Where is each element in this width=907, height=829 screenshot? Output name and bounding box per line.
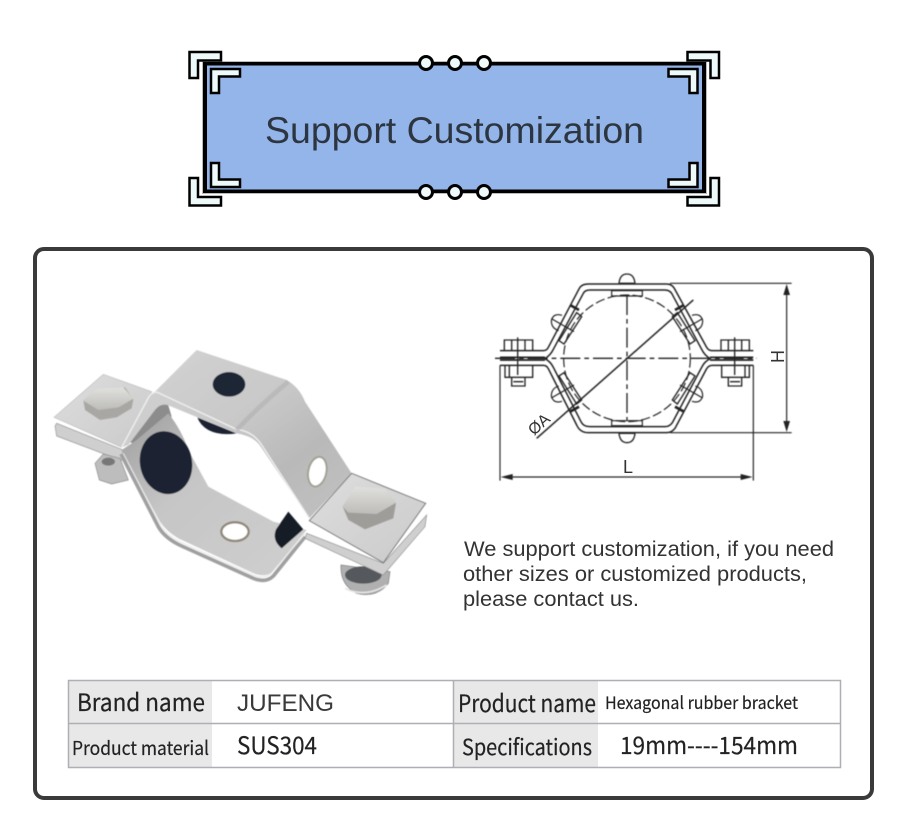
hexagon inner strap <box>545 290 710 359</box>
pipe circle <box>564 295 690 422</box>
dimension L <box>500 365 753 481</box>
brand value: JUFENG <box>237 690 334 717</box>
right bottom nut <box>341 565 390 595</box>
material value: SUS304 <box>237 726 317 761</box>
upper strap hole <box>305 455 329 488</box>
note line 3: please contact us. <box>463 588 639 611</box>
lower strap hole <box>221 522 249 541</box>
specifications value: 19mm----154mm <box>620 726 798 761</box>
label H: H <box>768 350 788 363</box>
specifications label: Specifications <box>462 730 592 762</box>
banner <box>190 52 719 206</box>
rubber pad, right <box>275 512 303 548</box>
product name label: Product name <box>458 684 596 719</box>
banner title: Support Customization <box>265 110 644 151</box>
dimension H <box>670 283 792 433</box>
right bolts <box>721 337 749 386</box>
banner connector circles <box>420 56 490 198</box>
main panel <box>35 249 872 798</box>
table grid <box>68 680 840 768</box>
material label: Product material <box>72 734 209 761</box>
label cell backgrounds <box>69 681 598 767</box>
product photo: hexagonal bracket <box>54 350 427 595</box>
right lower plate <box>305 515 427 575</box>
flange joints <box>500 357 753 360</box>
bracket left slope inside <box>127 397 172 445</box>
note line 2: other sizes or customized products, <box>463 563 807 586</box>
top and bottom pads <box>612 291 642 426</box>
diameter line <box>537 300 693 438</box>
label diameter A: ØA <box>525 411 554 439</box>
hexagon outer strap <box>500 284 753 351</box>
note line 1: We support customization, if you need <box>464 538 834 561</box>
lower strap edge <box>121 454 305 580</box>
customization note <box>463 538 834 611</box>
bracket lower strap face <box>122 413 307 575</box>
banner panel <box>202 61 707 194</box>
right flange <box>309 473 426 563</box>
left bolts <box>504 337 533 386</box>
technical drawing <box>495 274 792 481</box>
rubber pad, rear top <box>197 417 237 434</box>
bolt head, right <box>343 487 396 529</box>
bracket upper strap <box>122 350 352 518</box>
rear nut, left <box>95 454 128 484</box>
rubber plug, top <box>213 372 245 397</box>
upper strap highlight edge <box>122 392 309 518</box>
left flange <box>54 374 152 447</box>
rubber pad, left <box>134 426 198 499</box>
label L: L <box>623 457 633 477</box>
specification table <box>68 680 840 768</box>
centre lines <box>495 295 757 420</box>
upper strap crease <box>237 382 288 430</box>
banner corner brackets <box>190 52 719 206</box>
drawing labels <box>525 350 788 477</box>
brand name: Brand name <box>77 683 205 718</box>
diagonal pads and plugs <box>551 305 703 412</box>
bolt head, left <box>83 387 133 420</box>
top and bottom plugs <box>619 274 635 443</box>
product name value: Hexagonal rubber bracket <box>605 689 799 714</box>
lower plate edge, left <box>55 423 127 462</box>
